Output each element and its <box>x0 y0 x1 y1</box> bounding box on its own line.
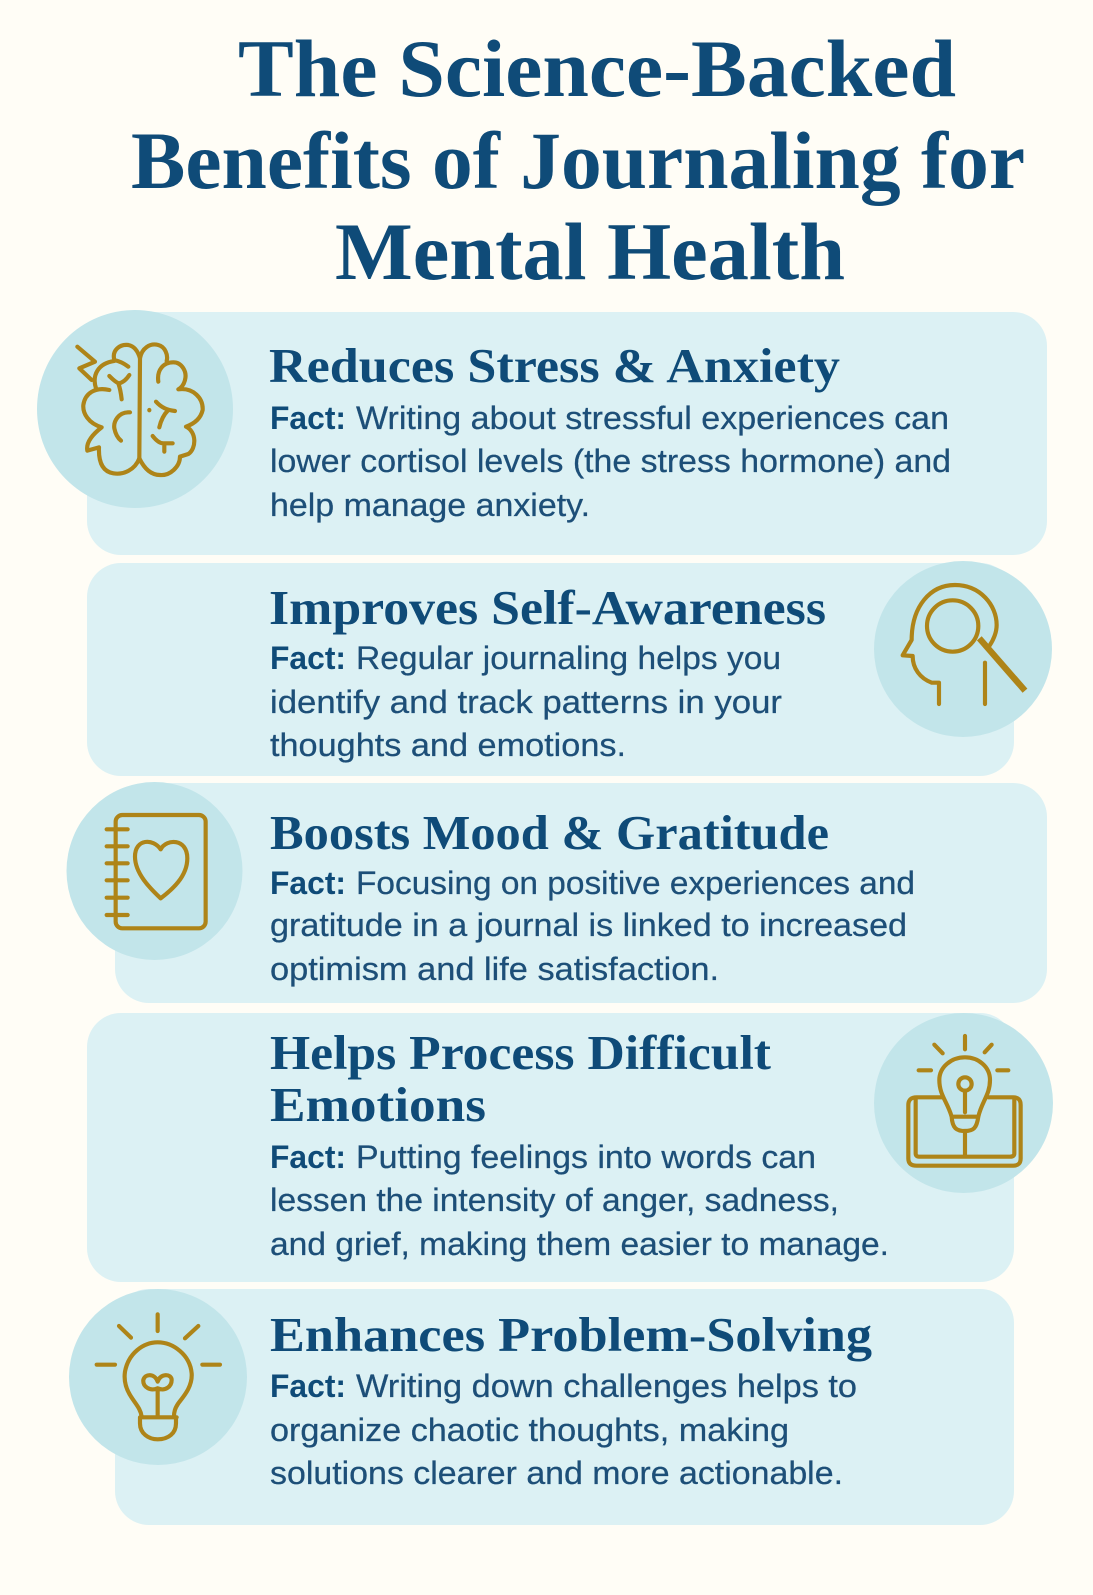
heading <box>270 1025 772 1132</box>
panel: reduces stress and anxiety <box>37 310 1047 555</box>
icon: lightbulb over book <box>874 1013 1053 1193</box>
heading: Boosts Mood & Gratitude <box>270 805 829 860</box>
text block: Fact: <box>270 1368 346 1404</box>
text block: thoughts and emotions. <box>270 727 626 763</box>
text block: lower cortisol levels (the stress hormone) and <box>270 443 951 479</box>
text block <box>270 400 951 523</box>
panel: helps process difficult emotions <box>87 1013 1053 1282</box>
title: Mental Health <box>335 206 845 297</box>
heading: Reduces Stress & Anxiety <box>269 338 841 393</box>
panel: enhances problem-solving <box>69 1289 1014 1525</box>
icon: head with magnifier <box>874 561 1052 737</box>
icon: lightbulb with sprout <box>69 1289 247 1465</box>
icon: brain <box>37 310 233 508</box>
text block: Writing down challenges helps to <box>356 1368 857 1404</box>
title: Benefits of Journaling for <box>131 115 1025 206</box>
text block: gratitude in a journal is linked to increased <box>270 907 907 943</box>
text block: lessen the intensity of anger, sadness, <box>270 1182 839 1218</box>
text block: Fact: <box>270 400 346 436</box>
text block <box>270 865 915 987</box>
panel: improves self-awareness <box>87 561 1052 776</box>
text block: identify and track patterns in your <box>270 684 782 720</box>
text block: optimism and life satisfaction. <box>270 951 719 987</box>
text block: and grief, making them easier to manage. <box>270 1226 889 1262</box>
text block <box>270 1139 889 1262</box>
title: The Science-Backed <box>238 23 956 114</box>
text block: solutions clearer and more actionable. <box>270 1455 843 1491</box>
text block <box>270 1368 857 1491</box>
title <box>131 23 1025 297</box>
text block: Regular journaling helps you <box>356 640 781 676</box>
panel: boosts mood and gratitude <box>66 782 1047 1003</box>
heading: Enhances Problem-Solving <box>270 1307 873 1362</box>
text block: organize chaotic thoughts, making <box>270 1412 789 1448</box>
heading: Helps Process Difficult <box>270 1025 772 1080</box>
heading: Improves Self-Awareness <box>269 580 826 635</box>
text block <box>270 640 782 763</box>
text block: Putting feelings into words can <box>356 1139 816 1175</box>
text block: Fact: <box>270 640 346 676</box>
text block: Fact: <box>270 1139 346 1175</box>
text block: Writing about stressful experiences can <box>356 400 949 436</box>
icon: notebook with heart <box>66 782 242 960</box>
text block: Fact: <box>270 865 346 901</box>
text block: Focusing on positive experiences and <box>356 865 915 901</box>
heading: Emotions <box>270 1077 486 1132</box>
text block: help manage anxiety. <box>270 487 590 523</box>
